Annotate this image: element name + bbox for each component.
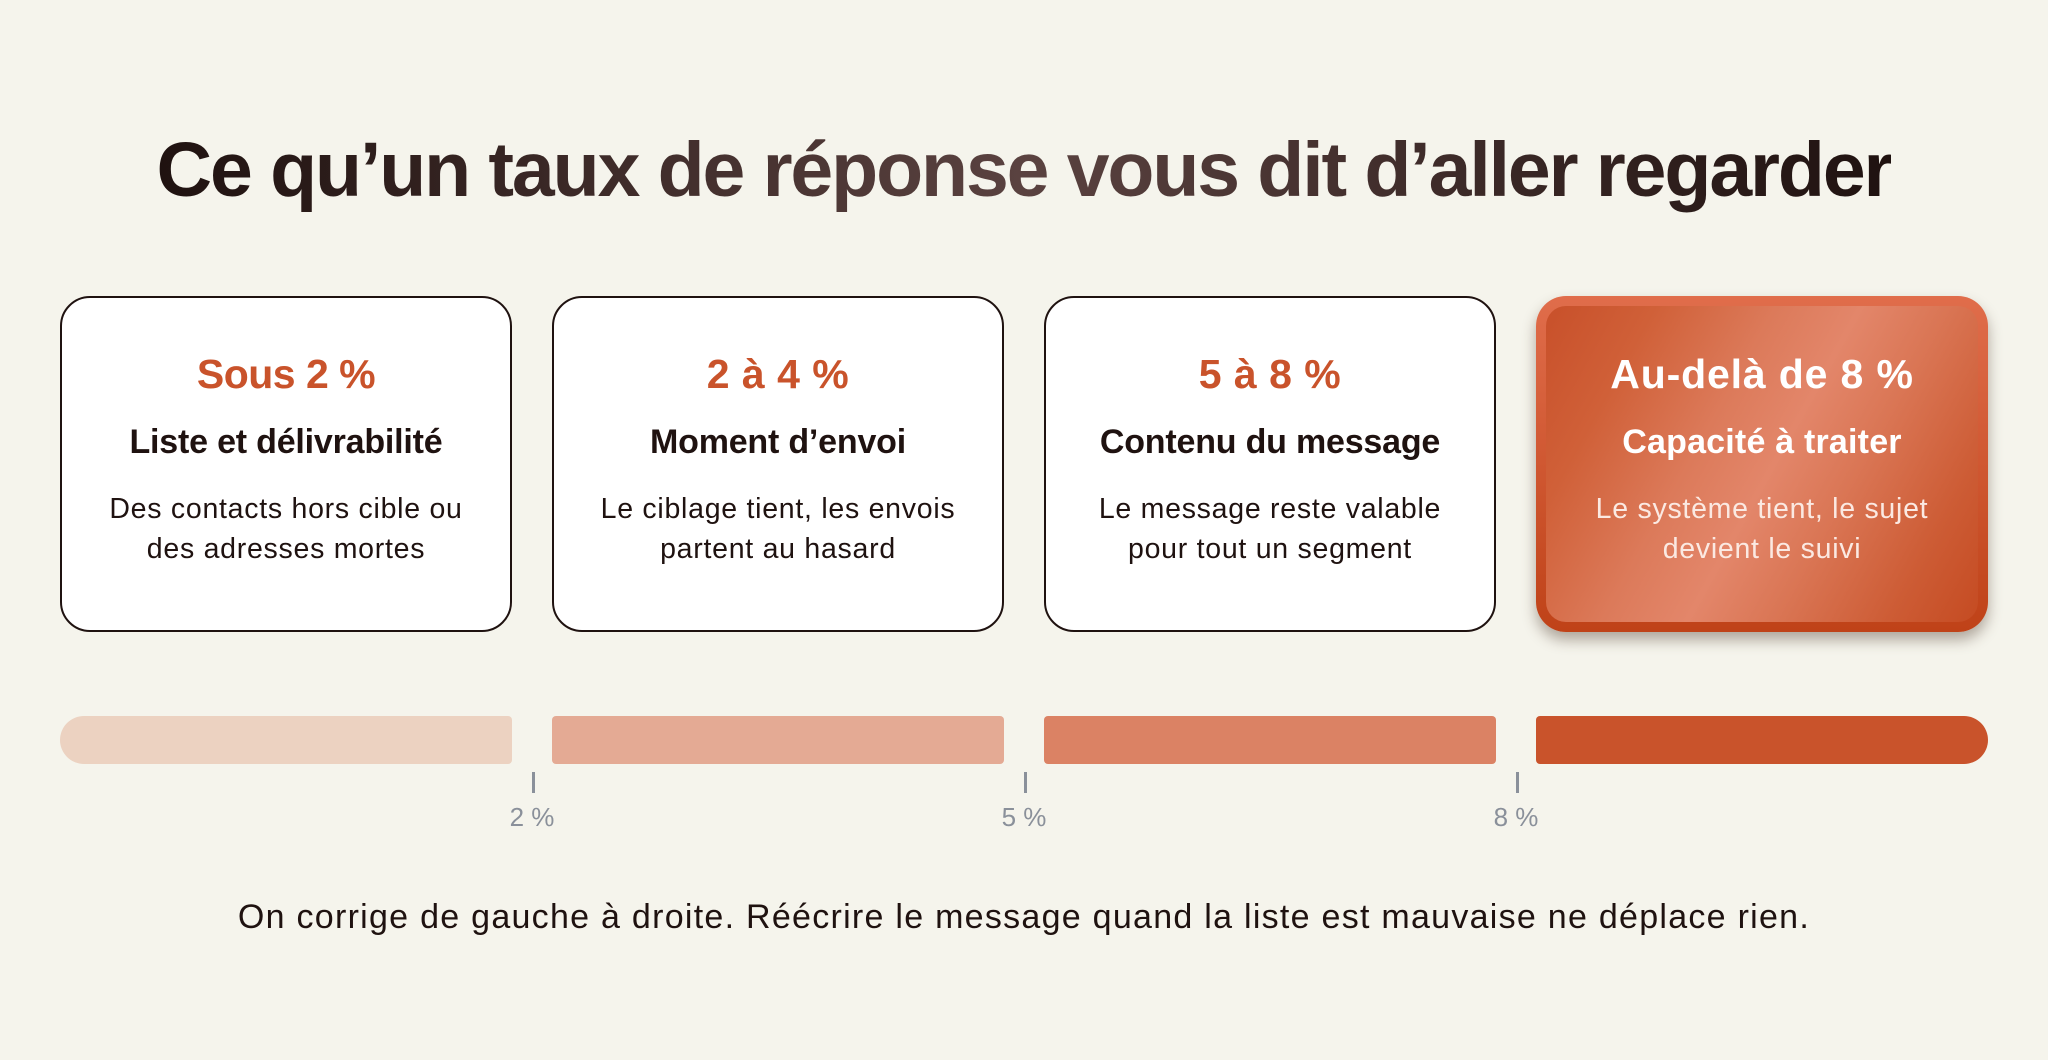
- card heading: Moment d’envoi: [650, 423, 906, 461]
- card description: devient le suivi: [1663, 533, 1861, 565]
- card description: Le message reste valable: [1099, 493, 1441, 525]
- tick: 5 %: [1024, 772, 1027, 793]
- card heading: Liste et délivrabilité: [129, 423, 443, 461]
- range label: Au-delà de 8 %: [1610, 351, 1914, 397]
- segment: 2 à 5 %: [552, 716, 1004, 764]
- segment: au-delà de 8 %: [1536, 716, 1988, 764]
- card heading: Contenu du message: [1100, 423, 1440, 461]
- card description: des adresses mortes: [147, 533, 425, 565]
- card description: Des contacts hors cible ou: [109, 493, 463, 525]
- card description: [109, 493, 463, 565]
- tick label: 5 %: 5 %: [1002, 802, 1046, 832]
- card description: Le ciblage tient, les envois: [601, 493, 955, 525]
- panel: sous 2 %: [60, 296, 512, 632]
- panel: 5 à 8 %: [1044, 296, 1496, 632]
- tick: 2 %: [532, 772, 535, 793]
- card heading: Capacité à traiter: [1622, 423, 1902, 461]
- segment: 5 à 8 %: [1044, 716, 1496, 764]
- segment: sous 2 %: [60, 716, 512, 764]
- card description: partent au hasard: [660, 533, 896, 565]
- panel: 2 à 4 %: [552, 296, 1004, 632]
- range label: 2 à 4 %: [707, 351, 849, 397]
- footer note: On corrige de gauche à droite. Réécrire le message quand la liste est mauvaise ne déplace rien.: [238, 898, 1810, 936]
- card description: Le système tient, le sujet: [1596, 493, 1928, 525]
- tick label: 2 %: 2 %: [510, 802, 554, 832]
- tick: 8 %: [1516, 772, 1519, 793]
- card description: [1099, 493, 1441, 565]
- panel: au-delà de 8 % (highlighted): [1536, 296, 1988, 632]
- card description: [1596, 493, 1928, 565]
- tick label: 8 %: 8 %: [1494, 802, 1538, 832]
- scale bar: [60, 716, 1988, 764]
- range label: 5 à 8 %: [1199, 351, 1341, 397]
- title: Ce qu’un taux de réponse vous dit d’aller regarder: [157, 127, 1891, 213]
- range label: Sous 2 %: [197, 351, 375, 397]
- card description: [601, 493, 955, 565]
- card description: pour tout un segment: [1128, 533, 1412, 565]
